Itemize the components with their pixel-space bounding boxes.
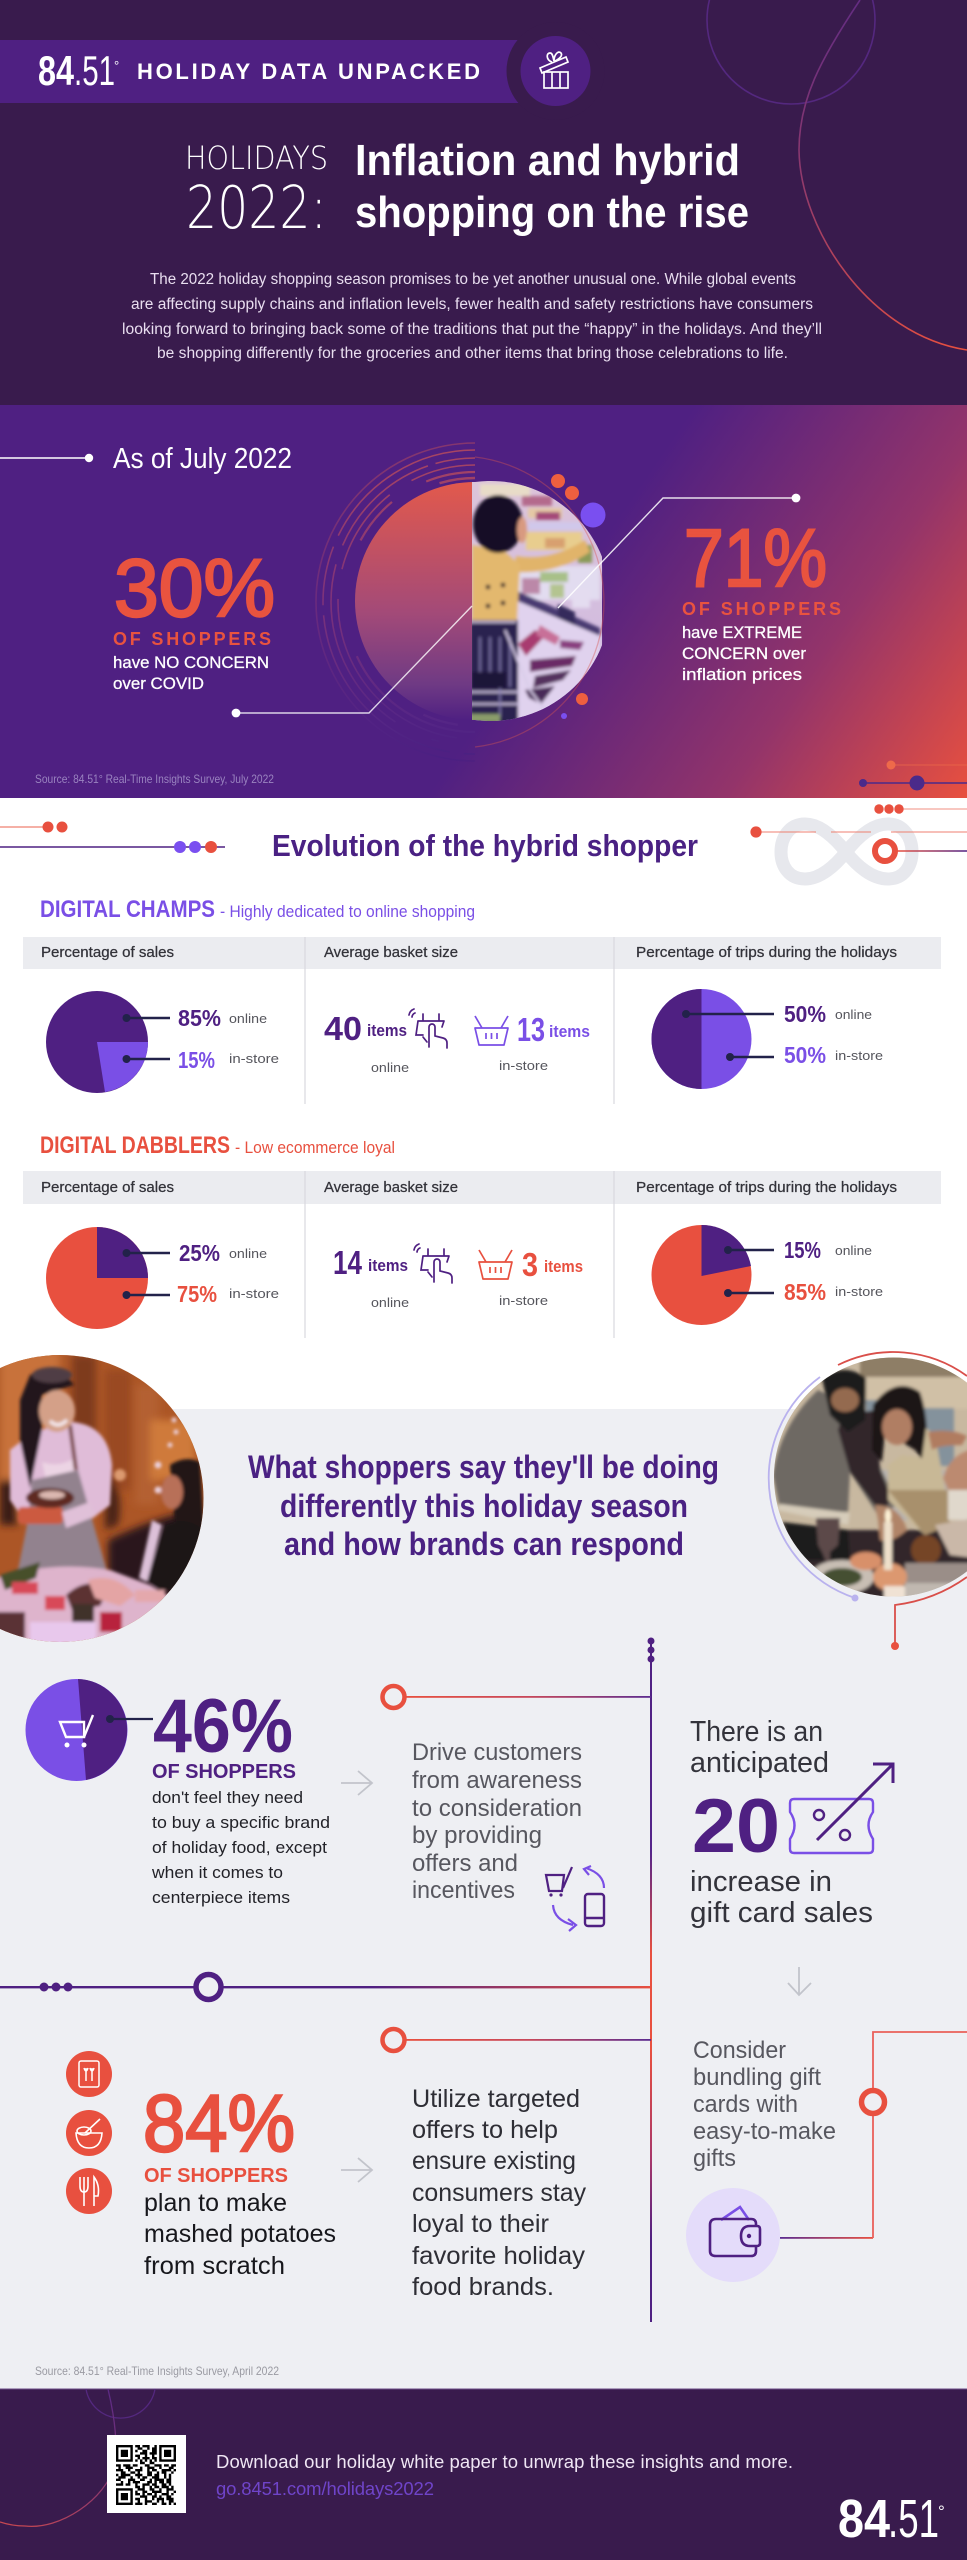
man: sweater [773, 1390, 898, 1515]
intro paragraph [122, 271, 822, 362]
heading: Evolution of the hybrid shopper [272, 828, 698, 863]
subsection heading: DIGITAL DABBLERS [40, 1132, 230, 1159]
panel: what shoppers say [0, 1350, 967, 2389]
heading: What shoppers say they'll be doing [248, 1449, 719, 1485]
photo: shopper in produce aisle [470, 480, 602, 724]
wine glass [816, 1518, 840, 1572]
average basket size: online [371, 1060, 409, 1075]
stat: 20 percent gift cards [690, 1716, 893, 1929]
stat: 46 percent: of holiday food, except [152, 1839, 327, 1857]
connector: left stat [232, 606, 472, 717]
stat: 20 percent gift cards: There is an [690, 1716, 823, 1748]
icon: basket [475, 1016, 508, 1045]
response: utilize targeted offers [412, 2085, 586, 2301]
holidays 2022 label: 2022: [186, 173, 327, 242]
icon: recipe book [66, 2051, 112, 2097]
logo: 84.51 [38, 47, 119, 94]
stat: 84 percent: 84% [143, 2079, 295, 2169]
decorative lines lower right [859, 760, 967, 790]
title lockup [185, 136, 749, 242]
candle [884, 1522, 892, 1570]
stat: 84 percent [66, 2051, 336, 2280]
connector: right stat [558, 494, 800, 608]
subsection heading [40, 1132, 395, 1159]
chart: 46 percent pie [26, 1679, 153, 1781]
main title: Inflation and hybrid [355, 136, 740, 185]
chart: percentage of trips: 15% [784, 1237, 821, 1263]
response: bundling gift cards: Consider [693, 2037, 786, 2064]
icon: cart [60, 1715, 93, 1737]
holidays 2022 label: HOLIDAYS [185, 139, 328, 177]
response: bundling gift cards: easy-to-make [693, 2118, 836, 2145]
decorative lines left [0, 822, 225, 853]
chart: percentage of trips: in-store [835, 1284, 883, 1299]
stat: 71 percent [682, 513, 841, 684]
panel: evolution of the hybrid shopper [0, 804, 967, 1338]
stat: 84 percent: mashed potatoes [144, 2220, 336, 2248]
arrow: to driving customers [341, 1771, 372, 1795]
heading line [0, 454, 93, 462]
connector: wallet to right edge [780, 2032, 967, 2239]
subsection: digital dabblers [23, 1132, 941, 1338]
stat: 20 percent gift cards: anticipated [690, 1747, 829, 1779]
response: bundling gift cards: cards with [693, 2091, 798, 2118]
turkey [911, 1535, 941, 1565]
chart: percentage of sales: online [229, 1246, 267, 1261]
subsection heading: - Low ecommerce loyal [235, 1139, 395, 1157]
average basket size: items [368, 1256, 408, 1275]
thin ring segment [475, 457, 604, 747]
average basket size: in-store [499, 1058, 548, 1073]
table header: Percentage of trips during the holidays [636, 1180, 897, 1196]
response: drive customers: incentives [412, 1877, 515, 1904]
call to action: Download our holiday white paper to unwrap these insights and more. [216, 2451, 793, 2472]
icon: ticket with percent and up arrow [790, 1764, 893, 1853]
average basket size: items [549, 1022, 590, 1041]
QR code [107, 2435, 186, 2513]
response: drive customers: offers and [412, 1850, 518, 1877]
logo: 84.51: ° [114, 58, 119, 73]
woman: face [39, 1390, 75, 1432]
heading: differently this holiday season [280, 1488, 688, 1524]
photo: family carving turkey [770, 1355, 967, 1605]
arrow: to utilize targeted offers [341, 2158, 372, 2182]
woman: blouse [10, 1422, 112, 1528]
woman: hair [20, 1369, 74, 1488]
decorative header circle and curve [707, 0, 967, 350]
holidays 2022 label [185, 139, 328, 242]
chart: percentage of trips: 50% [784, 1001, 826, 1027]
stat: 30 percent: have NO CONCERN [113, 653, 269, 672]
stat: 30 percent: over COVID [113, 674, 204, 693]
icon: fork and knife [66, 2168, 112, 2214]
response: bundling gift cards [693, 2037, 836, 2172]
stat: 71 percent: 71% [684, 513, 827, 604]
table header [23, 1171, 941, 1338]
main title: shopping on the rise [355, 188, 749, 237]
response: drive customers: from awareness [412, 1767, 582, 1794]
subsection heading: - Highly dedicated to online shopping [220, 903, 475, 921]
icon: cart and phone exchange [546, 1866, 604, 1931]
table food [0, 1564, 168, 1639]
chart: percentage of sales: in-store [229, 1286, 279, 1301]
intro paragraph: are affecting supply chains and inflation levels, fewer health and safety restrictions have consumers [131, 296, 813, 313]
girl: dress [888, 1428, 950, 1535]
response: drive customers [412, 1739, 604, 1931]
girl: hair and face [872, 1386, 927, 1465]
table header: Percentage of sales [41, 1180, 174, 1196]
average basket size: 14 [333, 1244, 363, 1281]
stat: 46 percent: OF SHOPPERS [152, 1761, 296, 1783]
stat: 46 percent: when it comes to [151, 1864, 283, 1882]
logo: 84.51: 84 [38, 47, 74, 94]
icon: mixing bowl [66, 2110, 112, 2156]
response: utilize targeted offers: food brands. [412, 2273, 554, 2301]
stat: 30 percent [113, 543, 275, 693]
response: bundling gift cards: bundling gift [693, 2064, 821, 2091]
average basket size: online [371, 1295, 409, 1310]
table header: Percentage of sales [41, 945, 174, 961]
icon: touch screen [409, 1009, 447, 1048]
response: utilize targeted offers: ensure existing [412, 2147, 576, 2175]
chart: percentage of trips: online [835, 1007, 872, 1022]
logo: 84.51: ° [938, 2502, 945, 2521]
chart: half gradient disc [355, 482, 475, 720]
chart: percentage of trips: 85% [784, 1279, 826, 1305]
stat: 30 percent: 30% [114, 543, 275, 634]
icon: wallet [686, 2188, 780, 2282]
stat: 71 percent: CONCERN over [682, 644, 806, 663]
chart: percentage of sales: 15% [178, 1047, 215, 1073]
average basket size: 13 [517, 1011, 545, 1048]
subsection: digital champs [23, 896, 941, 1104]
panel: footer [0, 2389, 967, 2560]
photo: woman serving food [0, 1350, 210, 1650]
chart: percentage of trips: online [835, 1243, 872, 1258]
table header: Average basket size [324, 945, 458, 961]
response: drive customers: by providing [412, 1822, 542, 1849]
arrow: down to bundling [788, 1967, 811, 1995]
average basket size [324, 1009, 590, 1075]
decorative dots [551, 474, 606, 719]
stat: 20 percent gift cards: increase in [690, 1866, 832, 1898]
subsection heading [40, 896, 475, 923]
heading [248, 1449, 719, 1562]
plate and salad [810, 1560, 874, 1594]
average basket size: items [544, 1257, 583, 1276]
average basket size: items [367, 1021, 407, 1040]
father hand [875, 1505, 907, 1541]
pumpkins [850, 1552, 882, 1570]
chart: percentage of sales [46, 1227, 279, 1329]
heading: and how brands can respond [284, 1526, 684, 1562]
logo: 84.51: .51 [888, 2489, 939, 2549]
panel: as of July 2022 [0, 405, 967, 798]
banner text: HOLIDAY DATA UNPACKED [137, 59, 480, 84]
chart: percentage of trips [652, 989, 883, 1089]
panel: header [0, 0, 967, 405]
man: head [822, 1370, 866, 1432]
source note: Source: 84.51° Real-Time Insights Survey, April 2022 [35, 2364, 279, 2378]
main title [355, 136, 749, 237]
stat: 20 percent gift cards: 20 [692, 1784, 780, 1869]
logo: 84.51: .51 [74, 47, 115, 94]
logo: 84.51 [838, 2489, 945, 2549]
subsection heading: DIGITAL CHAMPS [40, 896, 215, 923]
structure: connector lines [0, 1638, 654, 2322]
call to action: go.8451.com/holidays2022 [216, 2478, 434, 2499]
decorative footer curves [0, 2389, 155, 2526]
chart: percentage of trips [652, 1225, 883, 1325]
concentric arcs [316, 443, 475, 761]
intro paragraph: The 2022 holiday shopping season promises to be yet another unusual one. While global events [150, 271, 796, 288]
intro paragraph: looking forward to bringing back some of the traditions that put the “happy” in the holidays. And they’ll [122, 321, 822, 338]
stat: 46 percent: centerpiece items [152, 1889, 290, 1907]
response: utilize targeted offers: Utilize targeted [412, 2085, 580, 2113]
response: utilize targeted offers: favorite holiday [412, 2242, 586, 2270]
chart: percentage of sales: 85% [178, 1005, 221, 1031]
table header: Average basket size [324, 1180, 458, 1196]
chart: percentage of trips: 50% [784, 1042, 826, 1068]
table header: Percentage of trips during the holidays [636, 945, 897, 961]
seated guest [170, 1459, 204, 1530]
decorative rings around photo [769, 1352, 967, 1650]
average basket size [333, 1244, 583, 1310]
woman: apron [18, 1470, 108, 1575]
stat: 46 percent [26, 1679, 330, 1907]
stat: 20 percent gift cards: gift card sales [690, 1897, 873, 1929]
average basket size: in-store [499, 1293, 548, 1308]
stat: 46 percent: 46% [153, 1684, 293, 1769]
intro paragraph: be shopping differently for the groceries and other items that bring those celebrations to life. [157, 345, 788, 362]
response: drive customers: Drive customers [412, 1739, 582, 1766]
chart: percentage of sales: online [229, 1011, 267, 1026]
icon: infinity with lines [750, 804, 967, 879]
chart: percentage of trips: in-store [835, 1048, 883, 1063]
call to action [216, 2451, 793, 2499]
average basket size: 3 [522, 1246, 538, 1283]
stat: 71 percent: have EXTREME [682, 623, 802, 642]
chart: percentage of sales [46, 991, 279, 1093]
stat: 30 percent: OF SHOPPERS [113, 629, 271, 649]
woman: basket and food [18, 1507, 63, 1524]
banner: holiday data unpacked [0, 22, 604, 120]
icon: touch screen [414, 1244, 452, 1283]
stat: 84 percent: plan to make [144, 2189, 287, 2217]
stat: 71 percent: inflation prices [682, 665, 802, 684]
stat: 46 percent: to buy a specific brand [152, 1814, 330, 1832]
stat: 71 percent: OF SHOPPERS [682, 599, 841, 619]
logo: 84.51: 84 [838, 2489, 890, 2549]
stat: 84 percent: from scratch [144, 2252, 285, 2280]
icon: basket [479, 1250, 512, 1279]
chart: percentage of sales: 25% [179, 1240, 220, 1266]
average basket size: 40 [324, 1010, 362, 1047]
chart: percentage of sales: 75% [177, 1281, 217, 1307]
icon: gift [520, 36, 590, 106]
response: utilize targeted offers: offers to help [412, 2116, 558, 2144]
response: utilize targeted offers: consumers stay [412, 2179, 586, 2207]
stat: 46 percent: don't feel they need [152, 1789, 303, 1807]
heading: as of July 2022: As of July 2022 [113, 443, 292, 475]
table [786, 1528, 967, 1596]
stat: 84 percent: OF SHOPPERS [144, 2165, 288, 2187]
response: utilize targeted offers: loyal to their [412, 2210, 549, 2238]
table header [23, 937, 941, 1104]
chart: percentage of sales: in-store [229, 1051, 279, 1066]
response: bundling gift cards: gifts [693, 2145, 736, 2172]
source note: Source: 84.51° Real-Time Insights Survey, July 2022 [35, 772, 274, 786]
response: drive customers: to consideration [412, 1795, 582, 1822]
